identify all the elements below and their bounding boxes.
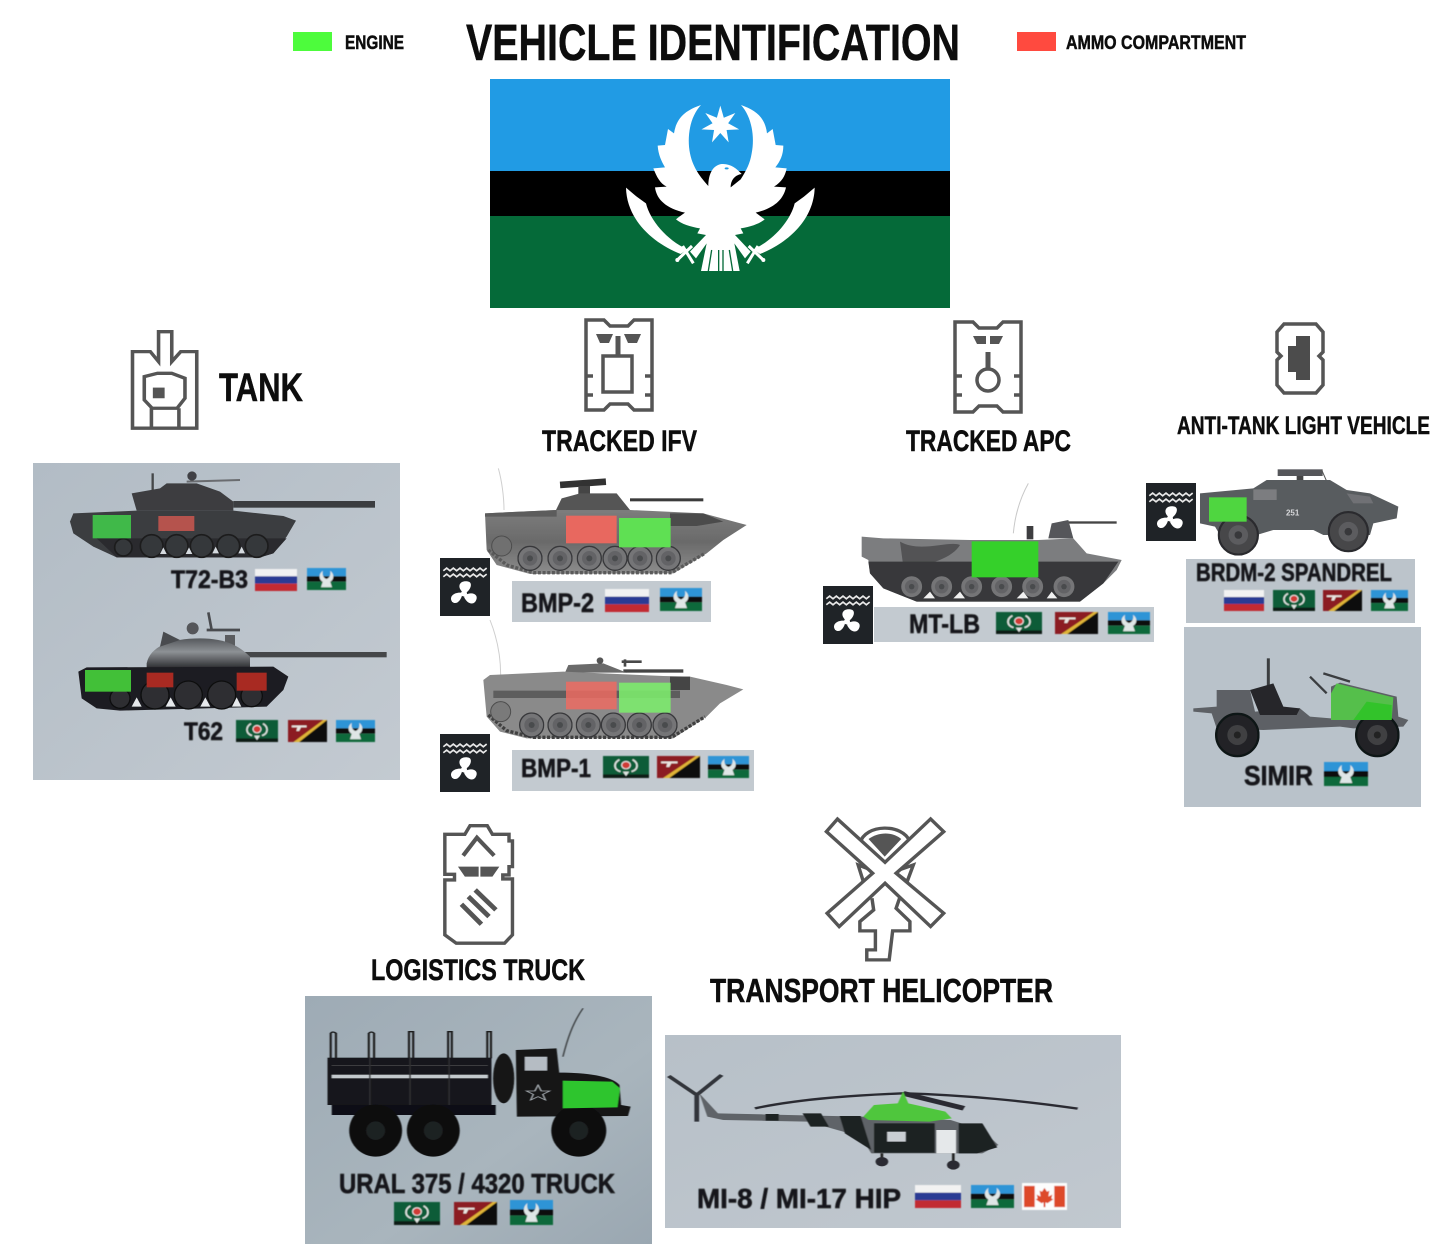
icon: amphibious BMP-1 bbox=[440, 734, 490, 792]
label: Mi-8 / Mi-17 Hip: MI-8 / MI-17 HIP bbox=[697, 1183, 901, 1214]
heading: logistics truck bbox=[371, 826, 585, 987]
vehicle: T62 bbox=[78, 612, 387, 711]
vehicle: BMP-1 bbox=[483, 620, 743, 738]
legend: engine: ENGINE bbox=[345, 33, 404, 54]
label: BRDM-2 Spandrel bbox=[1186, 559, 1415, 623]
label: T72-B3 bbox=[171, 566, 346, 594]
legend: ammo compartment: AMMO COMPARTMENT bbox=[1066, 33, 1246, 54]
label: Mi-8 / Mi-17 Hip bbox=[697, 1183, 1067, 1214]
label: MT-LB: MT-LB bbox=[909, 609, 980, 639]
label: BMP-1: BMP-1 bbox=[521, 753, 591, 783]
panel: tanks bbox=[33, 463, 400, 780]
heading: transport helicopter: TRANSPORT HELICOPTER bbox=[710, 972, 1053, 1009]
label: T62 bbox=[184, 718, 375, 746]
icon: anti-tank light vehicle bbox=[1277, 324, 1323, 393]
label: Simir: SIMIR bbox=[1244, 760, 1313, 791]
label: Ural truck: URAL 375 / 4320 TRUCK bbox=[339, 1168, 615, 1199]
heading: anti-tank light vehicle bbox=[1177, 324, 1430, 440]
icon: tracked APC bbox=[955, 322, 1021, 412]
legend: engine bbox=[293, 32, 404, 54]
heading: tank bbox=[132, 332, 303, 428]
title: VEHICLE IDENTIFICATION bbox=[466, 14, 960, 71]
flag: Karmakov faction emblem flag bbox=[490, 79, 950, 308]
label: MT-LB bbox=[874, 607, 1154, 642]
icon: amphibious BRDM-2 bbox=[1146, 483, 1196, 541]
vehicle: BRDM-2 Spandrel bbox=[1200, 469, 1398, 555]
heading: tracked IFV bbox=[542, 320, 697, 458]
panel: Simir bbox=[1184, 627, 1421, 807]
icon: logistics truck bbox=[445, 826, 512, 943]
label: T72-B3: T72-B3 bbox=[171, 566, 248, 594]
label: BMP-2: BMP-2 bbox=[521, 588, 594, 618]
label: Ural truck bbox=[339, 1168, 615, 1225]
vehicle: T72-B3 bbox=[70, 471, 375, 557]
heading: tracked IFV: TRACKED IFV bbox=[542, 425, 697, 458]
vehicle: Ural truck bbox=[328, 1008, 631, 1157]
heading: tracked APC bbox=[906, 322, 1071, 458]
icon: transport helicopter bbox=[826, 819, 944, 960]
icon: tank bbox=[132, 332, 197, 428]
vehicle: BRDM-2 Spandrel: 251 bbox=[1286, 508, 1300, 517]
heading: transport helicopter bbox=[710, 819, 1053, 1009]
panel: transport helicopter bbox=[665, 1035, 1121, 1228]
label: BMP-1 bbox=[512, 750, 754, 791]
heading: logistics truck: LOGISTICS TRUCK bbox=[371, 954, 585, 987]
vehicle: Mi-8 helicopter bbox=[669, 1075, 1078, 1170]
panel: logistics truck bbox=[305, 996, 652, 1244]
icon: amphibious BMP-2 bbox=[440, 558, 490, 616]
vehicle: MT-LB bbox=[862, 483, 1122, 602]
icon: amphibious MT-LB bbox=[823, 586, 873, 644]
vehicle: Simir bbox=[1193, 658, 1408, 756]
label: BMP-2 bbox=[512, 581, 711, 622]
icon: tracked IFV bbox=[586, 320, 652, 410]
label: Simir bbox=[1244, 760, 1368, 791]
label: T62: T62 bbox=[184, 718, 223, 746]
heading: tank: TANK bbox=[219, 366, 303, 410]
vehicle: BMP-2 bbox=[485, 468, 747, 574]
legend: ammo compartment bbox=[1017, 32, 1246, 54]
label: BRDM-2 Spandrel: BRDM-2 SPANDREL bbox=[1196, 559, 1392, 587]
heading: tracked APC: TRACKED APC bbox=[906, 425, 1071, 458]
